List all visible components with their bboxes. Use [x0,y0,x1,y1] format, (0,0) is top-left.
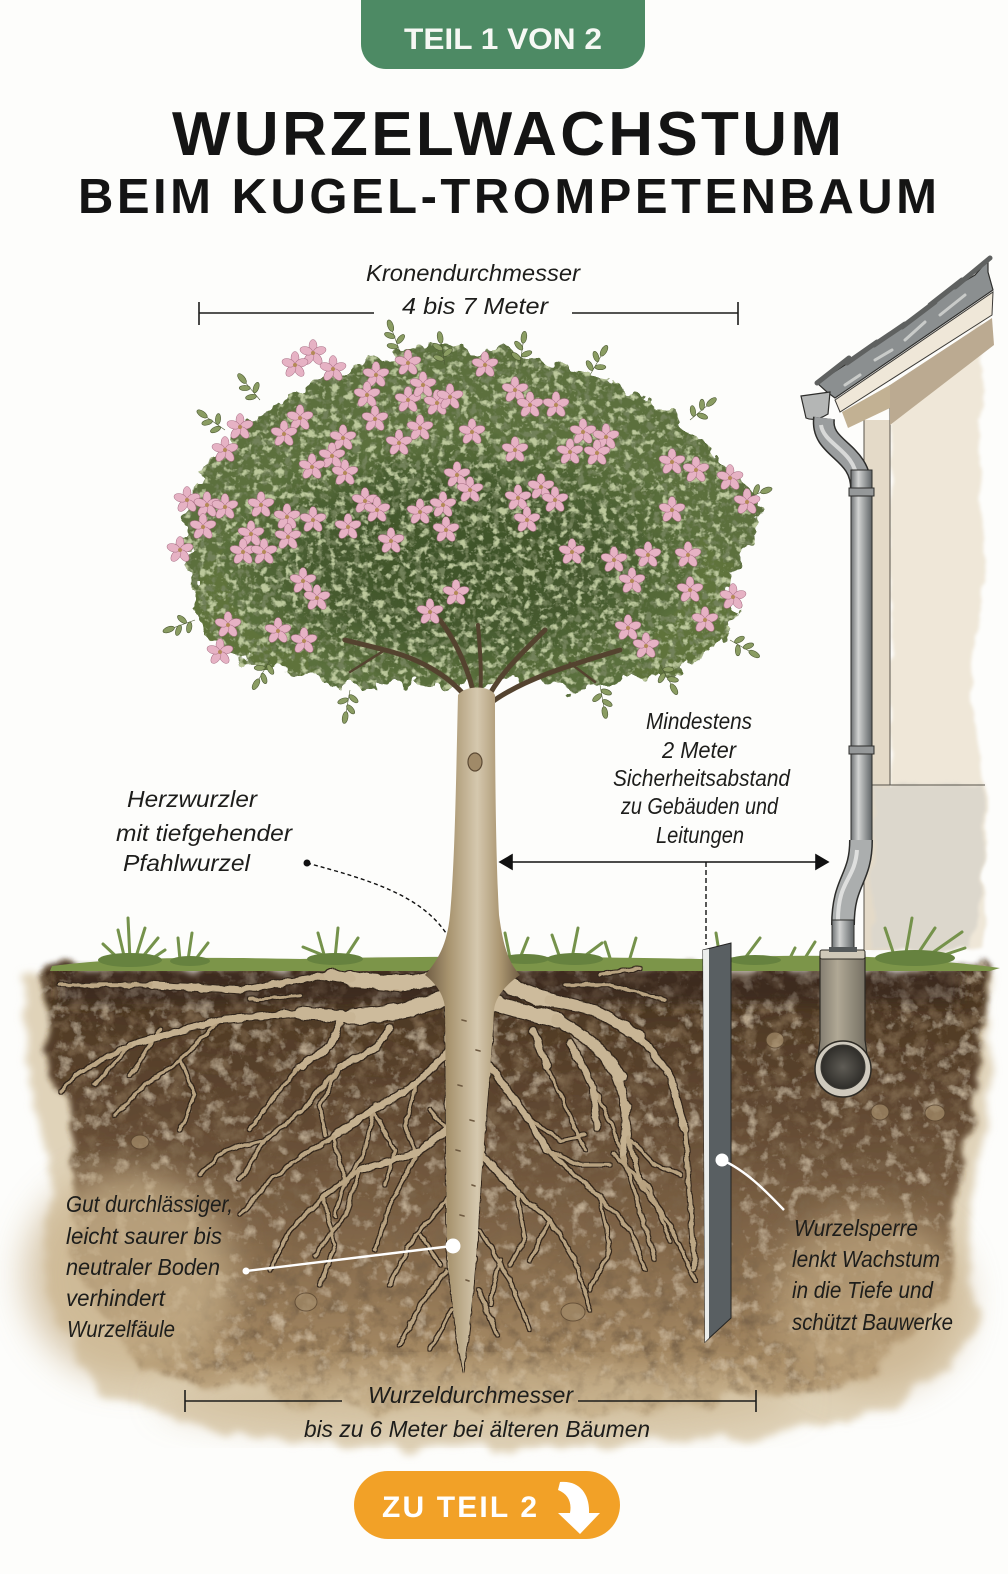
bark marks [456,1020,480,1281]
root diameter annotation: bis zu 6 Meter bei älteren Bäumen [304,1416,650,1442]
flowers [166,340,761,665]
annotation: soil: neutraler Boden [66,1254,220,1280]
crown diameter annotation: Kronendurchmesser [366,260,581,286]
lighter patch lower right [775,1210,965,1390]
annotation: root barrier: lenkt Wachstum [792,1246,940,1272]
double arrow [500,855,828,869]
annotation: safety distance: Mindestens [646,708,752,734]
sprigs at crown edge [159,316,776,725]
title: BEIM KUGEL-TROMPETENBAUM [78,170,937,224]
downspout straight [851,470,872,845]
annotation: soil: Wurzelfäule [67,1316,175,1342]
annotation: root barrier: schützt Bauwerke [792,1309,953,1335]
grass tuft stems [103,918,965,960]
main soil [45,968,990,1415]
badge: part 1 of 2 [361,0,645,69]
grass base [50,956,1000,971]
badge: part 1 of 2: TEIL 1 VON 2 [404,23,602,56]
drain socket and pipe [815,947,871,1097]
crown foliage [180,350,756,688]
tree crown [159,316,776,725]
roof fascia [835,292,993,412]
pale outer soil wash [24,974,994,1448]
annotation: root barrier: Wurzelsperre [794,1215,918,1241]
annotation: heart root: Pfahlwurzel [123,850,251,876]
wall column [864,420,890,950]
stones [131,1032,945,1321]
tree trunk and tap root body [425,688,520,1370]
arrow icon [558,1482,600,1534]
downspout upper bend [824,418,861,490]
annotation: safety distance: Leitungen [656,822,744,848]
button: to part 2: ZU TEIL 2 [382,1491,537,1524]
roof tiles [817,260,993,398]
annotation: heart root: mit tiefgehender [116,820,293,846]
soil cross-section [24,968,994,1448]
crown diameter annotation: 4 bis 7 Meter [402,293,549,319]
trunk knot [468,753,482,771]
crown diameter annotation [199,260,738,325]
annotation: root barrier: in die Tiefe und [792,1277,934,1303]
annotation: soil [66,1191,460,1342]
grass strip [50,918,1000,971]
tap root [445,990,494,1372]
root system [60,968,695,1372]
downspout and drain pipe [801,392,874,950]
title: WURZELWACHSTUM [172,100,842,169]
annotation: safety distance: zu Gebäuden und [620,793,779,819]
root diameter annotation: Wurzeldurchmesser [368,1382,574,1408]
wall plinth [872,785,985,950]
button: to part 2 [354,1471,620,1539]
lighter patch bottom [160,1370,800,1430]
pipe opening [815,1041,871,1097]
annotation: safety distance [500,708,828,945]
grass clumps [98,950,955,967]
title [78,100,937,224]
wall [890,325,985,950]
downspout lower bend [843,840,861,925]
house wall and roof [817,258,994,950]
branches [345,620,620,705]
annotation: soil: verhindert [66,1285,167,1311]
annotation: safety distance: Sicherheitsabstand [613,765,791,791]
annotation: root barrier [716,1154,953,1335]
annotation: soil: leicht saurer bis [66,1223,222,1249]
thick roots [350,972,557,1020]
root diameter annotation [185,1382,756,1442]
lighter patch lower left [25,1170,235,1380]
gutter [801,392,830,419]
annotation: safety distance: 2 Meter [661,737,737,763]
annotation: soil: Gut durchlässiger, [66,1191,233,1217]
root barrier [703,943,731,1342]
annotation: heart root [116,786,446,933]
medium roots [130,975,685,1193]
roof underside shadow [890,318,994,425]
annotation: heart root: Herzwurzler [127,786,258,812]
fine roots [60,968,695,1350]
darker soil band [60,968,960,1004]
